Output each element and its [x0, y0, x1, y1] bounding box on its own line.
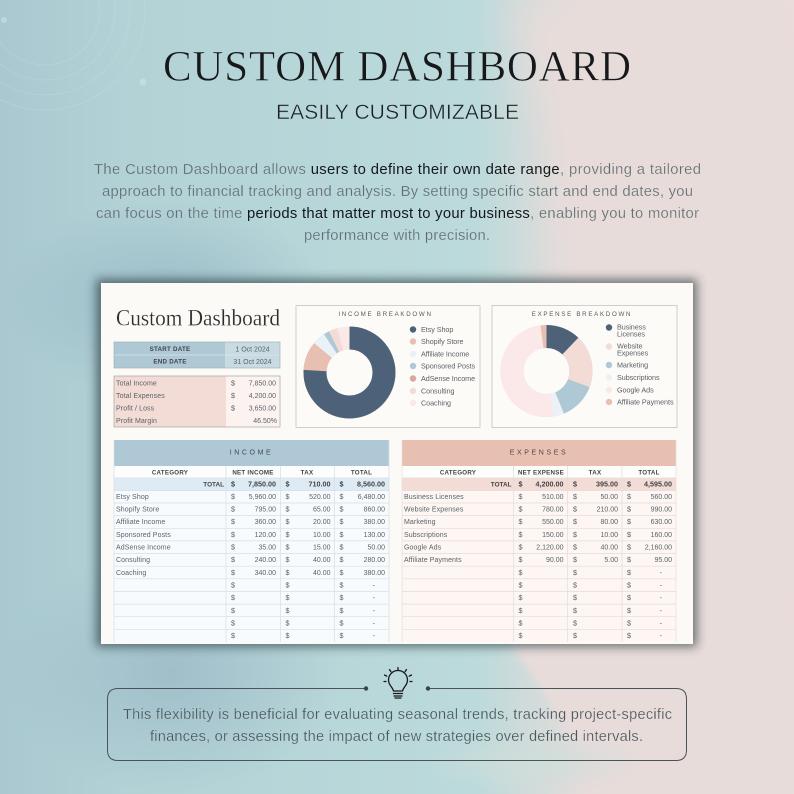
expenses rows: 990.00 — [651, 507, 672, 514]
expenses rows: $ — [627, 505, 631, 514]
income legend — [410, 325, 475, 408]
expenses totals row: $ — [518, 480, 522, 488]
income rows: $ — [286, 530, 290, 539]
panel: income breakdown: INCOME BREAKDOWN — [338, 311, 433, 318]
expense legend: Google Ads — [617, 386, 654, 394]
expenses rows: $ — [627, 606, 631, 615]
expenses table: CATEGORY — [440, 470, 477, 476]
expenses rows: $ — [627, 492, 631, 501]
expenses totals row: TOTAL — [491, 482, 512, 488]
expenses rows: 90.00 — [546, 557, 564, 564]
income rows: 40.00 — [313, 570, 331, 577]
expenses rows: $ — [518, 580, 522, 590]
income rows: $ — [340, 631, 344, 640]
expenses rows: - — [660, 620, 663, 627]
income rows: 35.00 — [258, 544, 276, 552]
expenses rows: - — [660, 608, 663, 615]
expenses rows: $ — [573, 606, 577, 615]
summary table: $ — [231, 404, 235, 412]
income rows: - — [373, 582, 376, 590]
income rows: 50.00 — [367, 544, 385, 552]
intro text block: The Custom Dashboard allows users to define their own date range, providing a tailored — [94, 162, 701, 178]
expense legend: Affiliate Payments — [617, 398, 674, 406]
date range table: 1 Oct 2024 — [235, 346, 270, 354]
panel: income breakdown — [296, 306, 480, 428]
expenses totals row — [491, 480, 672, 488]
income legend: Affiliate Income — [421, 350, 469, 358]
expenses rows: $ — [627, 580, 631, 590]
callout text — [123, 707, 672, 745]
expenses rows: $ — [627, 593, 631, 602]
income totals row: 7,850.00 — [248, 480, 276, 488]
subtitle: EASILY CUSTOMIZABLE — [276, 101, 519, 124]
income rows: AdSense Income — [116, 544, 171, 552]
income rows: $ — [286, 492, 290, 501]
summary table: 7,850.00 — [249, 380, 276, 388]
expenses rows: $ — [573, 618, 577, 627]
date range table: START DATE — [150, 346, 190, 353]
income table: TAX — [301, 470, 314, 476]
income rows: $ — [286, 542, 290, 552]
income rows: 10.00 — [313, 532, 331, 539]
expenses rows: 10.00 — [600, 532, 618, 539]
expenses table: EXPENSES — [510, 450, 568, 456]
income rows: $ — [231, 542, 235, 552]
income rows: 240.00 — [255, 557, 276, 564]
panel: expense breakdown — [492, 306, 677, 428]
income rows: $ — [286, 631, 290, 640]
expense legend — [606, 322, 674, 406]
expenses rows: 150.00 — [542, 532, 564, 539]
income rows: 130.00 — [364, 532, 385, 539]
income legend: Consulting — [421, 386, 455, 396]
expenses rows: 2,120.00 — [536, 544, 564, 552]
income rows: $ — [340, 606, 344, 615]
income legend: Sponsored Posts — [421, 362, 475, 370]
income rows: $ — [340, 542, 344, 552]
income rows: 520.00 — [309, 494, 331, 501]
icon: light bulb — [384, 668, 412, 698]
income rows: 340.00 — [255, 570, 276, 577]
expenses rows: $ — [627, 618, 631, 627]
expenses rows: $ — [518, 631, 522, 640]
income rows: $ — [340, 618, 344, 627]
income table: INCOME — [230, 450, 273, 456]
expense legend: Marketing — [617, 360, 648, 370]
income rows: 280.00 — [364, 557, 385, 564]
expenses rows: 510.00 — [542, 494, 564, 501]
expenses rows: $ — [573, 568, 577, 577]
income donut chart — [315, 338, 384, 407]
income rows: $ — [286, 593, 290, 602]
intro text block: approach to financial tracking and analysis. By setting specific start and end dates, you — [102, 184, 693, 200]
expenses totals row: 395.00 — [596, 480, 618, 488]
expenses rows: $ — [518, 542, 522, 552]
income rows: Consulting — [116, 557, 150, 564]
summary table: $ — [231, 391, 235, 400]
summary table: 46.50% — [253, 418, 277, 425]
income rows: - — [373, 633, 376, 640]
expenses table: TOTAL — [638, 470, 660, 476]
title: CUSTOM DASHBOARD — [163, 44, 631, 90]
expenses rows: $ — [518, 593, 522, 602]
date range table: 31 Oct 2024 — [233, 359, 272, 366]
summary table — [114, 376, 280, 427]
expense legend: Subscriptions — [617, 373, 660, 382]
expenses rows: $ — [627, 542, 631, 552]
expenses totals row: 4,200.00 — [536, 480, 564, 488]
income totals row: 710.00 — [309, 480, 331, 488]
income rows: $ — [286, 517, 290, 526]
income rows: Shopify Store — [116, 507, 159, 514]
expenses rows: 210.00 — [597, 507, 618, 514]
expenses rows: $ — [573, 492, 577, 501]
expenses rows: 2,160.00 — [645, 544, 672, 552]
expenses rows: 40.00 — [600, 544, 618, 552]
expenses rows: $ — [627, 530, 631, 539]
income legend: Shopify Store — [421, 337, 464, 346]
income rows: - — [373, 620, 376, 627]
income rows: $ — [340, 555, 344, 564]
income rows: 360.00 — [255, 519, 276, 526]
expenses rows: Marketing — [404, 519, 436, 526]
expense legend: Expenses — [617, 348, 649, 358]
income rows: $ — [231, 530, 235, 539]
expenses rows: $ — [518, 517, 522, 526]
income rows: $ — [286, 606, 290, 615]
dashboard panel — [96, 279, 697, 647]
income rows: $ — [340, 492, 344, 501]
income rows: $ — [286, 505, 290, 514]
expenses rows: - — [660, 582, 663, 590]
income rows — [116, 492, 385, 640]
expenses rows: Business Licenses — [404, 494, 464, 501]
date range table — [114, 342, 280, 368]
income rows: $ — [231, 555, 235, 564]
expenses rows: $ — [573, 593, 577, 602]
expenses rows: $ — [518, 618, 522, 627]
expenses rows: $ — [573, 505, 577, 514]
expenses rows: $ — [627, 568, 631, 577]
dashboard title: Custom Dashboard — [116, 306, 280, 330]
income rows: - — [373, 595, 376, 602]
expenses rows: - — [660, 595, 663, 602]
income rows: Sponsored Posts — [116, 532, 171, 539]
income rows: $ — [340, 593, 344, 602]
income totals row: 8,560.00 — [357, 480, 385, 488]
expenses rows: $ — [518, 606, 522, 615]
expenses rows: 630.00 — [651, 519, 672, 526]
summary table: Profit Margin — [116, 418, 157, 425]
income rows: 65.00 — [313, 507, 331, 514]
expenses rows: Google Ads — [404, 544, 442, 552]
panel: expense breakdown: EXPENSE BREAKDOWN — [532, 311, 632, 318]
expenses rows: $ — [518, 555, 522, 564]
income rows: $ — [286, 618, 290, 627]
income totals row: $ — [340, 480, 344, 488]
income rows: $ — [340, 530, 344, 539]
income rows: 20.00 — [313, 519, 331, 526]
income rows: 795.00 — [255, 507, 276, 514]
callout — [108, 668, 686, 760]
expenses rows: $ — [518, 505, 522, 514]
income rows: $ — [340, 568, 344, 577]
income legend: AdSense Income — [421, 374, 475, 383]
income rows: $ — [286, 568, 290, 577]
income rows: $ — [231, 517, 235, 526]
income rows: $ — [231, 492, 235, 501]
income rows: $ — [231, 606, 235, 615]
income rows: 40.00 — [313, 557, 331, 564]
expenses totals row: $ — [573, 480, 577, 488]
intro text block: performance with precision. — [304, 228, 490, 244]
income table: NET INCOME — [232, 470, 274, 476]
income rows: Affiliate Income — [116, 519, 165, 526]
income legend: Etsy Shop — [421, 325, 453, 334]
summary table: 3,650.00 — [249, 406, 276, 412]
expenses rows: 160.00 — [651, 532, 672, 539]
expenses rows: $ — [573, 542, 577, 552]
income totals row — [203, 480, 385, 488]
income rows: $ — [231, 631, 235, 640]
date range table: END DATE — [153, 358, 187, 366]
expenses rows: $ — [573, 580, 577, 590]
expenses rows: - — [660, 633, 663, 640]
expenses rows: 550.00 — [542, 519, 564, 526]
income totals row: TOTAL — [203, 482, 224, 488]
income rows: $ — [340, 505, 344, 514]
income legend: Coaching — [421, 398, 451, 408]
income rows: 120.00 — [255, 532, 276, 539]
expenses rows: Subscriptions — [404, 532, 448, 539]
income rows: 6,480.00 — [358, 494, 385, 501]
income totals row: $ — [231, 480, 235, 488]
expense legend: Licenses — [617, 330, 645, 338]
income rows: $ — [231, 568, 235, 577]
income rows: - — [373, 608, 376, 615]
expenses table: NET EXPENSE — [518, 470, 564, 476]
expenses rows: $ — [518, 530, 522, 539]
income totals row: $ — [286, 480, 290, 488]
expense legend: Business — [617, 322, 646, 332]
income table — [114, 440, 389, 642]
income rows: $ — [286, 580, 290, 590]
expenses rows: 95.00 — [654, 557, 672, 564]
expenses rows: $ — [573, 631, 577, 640]
expenses rows: $ — [518, 568, 522, 577]
income rows: Etsy Shop — [116, 494, 149, 501]
intro text block — [94, 162, 701, 244]
expenses table: TAX — [589, 470, 602, 476]
expenses totals row: $ — [627, 480, 631, 488]
income rows: $ — [231, 505, 235, 514]
summary table: 4,200.00 — [249, 393, 276, 400]
income rows: 380.00 — [364, 570, 385, 577]
intro text block: can focus on the time periods that matter most to your business, enabling you to monitor — [96, 206, 699, 222]
expenses rows — [404, 492, 672, 640]
income rows: 5,960.00 — [249, 494, 276, 501]
income table: CATEGORY — [152, 470, 189, 476]
income rows: $ — [231, 618, 235, 627]
expenses rows: - — [660, 570, 663, 577]
expenses rows: Affiliate Payments — [404, 557, 462, 564]
summary table: Total Income — [116, 380, 157, 388]
income rows: 15.00 — [313, 544, 331, 552]
expenses rows: Website Expenses — [404, 507, 464, 514]
expenses rows: 560.00 — [651, 494, 672, 501]
expense legend: Website — [617, 342, 643, 350]
callout text: This flexibility is beneficial for evaluating seasonal trends, tracking project-specific — [123, 707, 672, 723]
expenses rows: $ — [627, 517, 631, 526]
expense donut chart — [512, 336, 581, 406]
expenses rows: $ — [627, 631, 631, 640]
expenses totals row: 4,595.00 — [644, 480, 672, 488]
income table: TOTAL — [351, 470, 372, 476]
expenses rows: 80.00 — [600, 519, 618, 526]
expenses rows: $ — [518, 492, 522, 501]
income rows: 380.00 — [364, 519, 385, 526]
income rows: Coaching — [116, 570, 146, 577]
income rows: 860.00 — [364, 507, 385, 514]
income rows: $ — [231, 580, 235, 590]
income rows: $ — [340, 517, 344, 526]
income rows: $ — [286, 555, 290, 564]
callout text: finances, or assessing the impact of new strategies over defined intervals. — [150, 729, 643, 745]
income rows: $ — [231, 593, 235, 602]
summary table: Total Expenses — [116, 393, 165, 400]
expenses rows: 5.00 — [604, 557, 618, 564]
expenses table — [402, 440, 676, 642]
expenses rows: 50.00 — [600, 494, 618, 501]
expenses rows: 780.00 — [542, 507, 564, 514]
income rows: $ — [340, 580, 344, 590]
expenses rows: $ — [573, 530, 577, 539]
expenses rows: $ — [573, 517, 577, 526]
summary table: Profit / Loss — [116, 406, 155, 412]
summary table: $ — [231, 378, 235, 388]
expenses rows: $ — [627, 555, 631, 564]
expenses rows: $ — [573, 555, 577, 564]
